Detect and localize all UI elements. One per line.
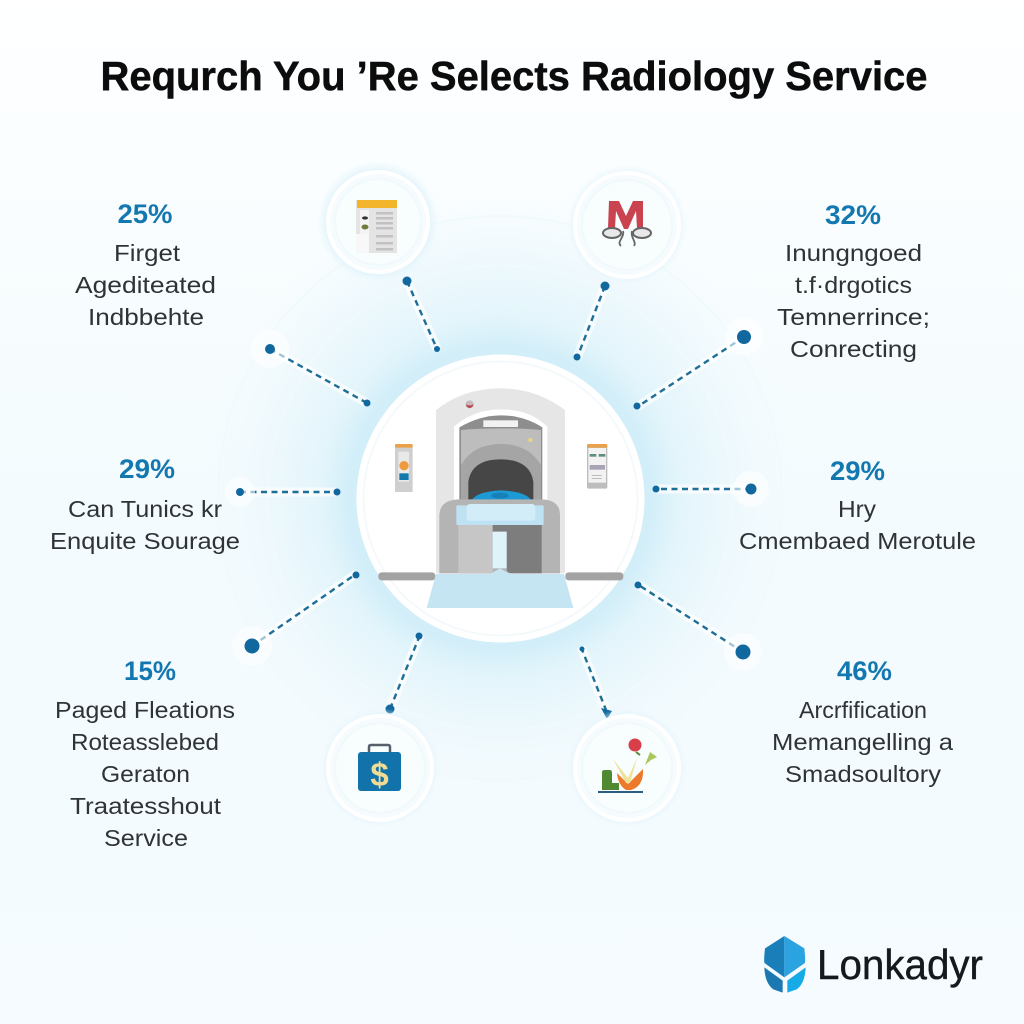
text block: 29% left <box>50 454 240 554</box>
text block: 25%: Indbbehte <box>88 304 204 330</box>
text block: 46%: Memangelling a <box>772 729 953 755</box>
text block: 29% right: Cmembaed Merotule <box>739 528 976 554</box>
text block: 15%: Service <box>104 825 188 851</box>
text block: 15%: 15% <box>124 656 176 686</box>
text block: 46%: Smadsoultory <box>785 761 942 787</box>
icon: dollar briefcase <box>320 708 440 828</box>
text block: 29% left: Can Tunics kr <box>68 496 222 522</box>
title: Requrch You ’Re Selects Radiology Service <box>100 53 928 99</box>
text block: 32%: Inungngoed <box>785 240 922 266</box>
connector line bands <box>240 281 751 710</box>
text block: 15%: Paged Fleations <box>55 697 235 723</box>
text block: 25%: 25% <box>118 199 172 229</box>
icon: left wall panel <box>395 444 413 492</box>
text block: 25%: Firget <box>114 240 181 266</box>
icon: right wall phone <box>587 444 607 489</box>
icon: red letter with instruments <box>567 165 687 285</box>
icon: food bowl <box>567 708 687 828</box>
text block: 29% left: 29% <box>119 454 175 484</box>
icon: document checklist <box>317 161 439 283</box>
connector end dots <box>225 276 769 719</box>
logo <box>764 936 983 993</box>
text block: 25%: Agediteated <box>75 272 216 298</box>
panel: central MRI scanner <box>356 354 644 642</box>
text block: 32%: t.f·drgotics <box>795 272 912 298</box>
text block: 32%: Temnerrince; <box>777 304 930 330</box>
text block: 15%: Roteasslebed <box>71 729 219 755</box>
text block: 46%: 46% <box>837 656 892 686</box>
text block: 29% right: Hry <box>838 496 877 522</box>
text block: 15%: Traatesshout <box>70 793 222 819</box>
text block: 32%: 32% <box>825 200 881 230</box>
text block: 46% <box>772 656 953 787</box>
text block: 46%: Arcrfification <box>799 697 927 723</box>
connector lines <box>240 281 751 710</box>
text block: 32%: Conrecting <box>790 336 917 362</box>
text block: 32% <box>777 200 930 362</box>
text block: 15%: Geraton <box>101 761 190 787</box>
icon: MRI machine <box>378 388 623 608</box>
icon: dollar briefcase: $ <box>370 756 389 793</box>
text block: 29% left: Enquite Sourage <box>50 528 240 554</box>
text block: 25% <box>75 199 216 330</box>
text block: 29% right: 29% <box>830 456 885 486</box>
logo wordmark: Lonkadyr <box>817 941 983 988</box>
text block: 29% right <box>739 456 976 554</box>
text block: 15% <box>55 656 235 851</box>
icon: logo mark <box>764 936 806 993</box>
